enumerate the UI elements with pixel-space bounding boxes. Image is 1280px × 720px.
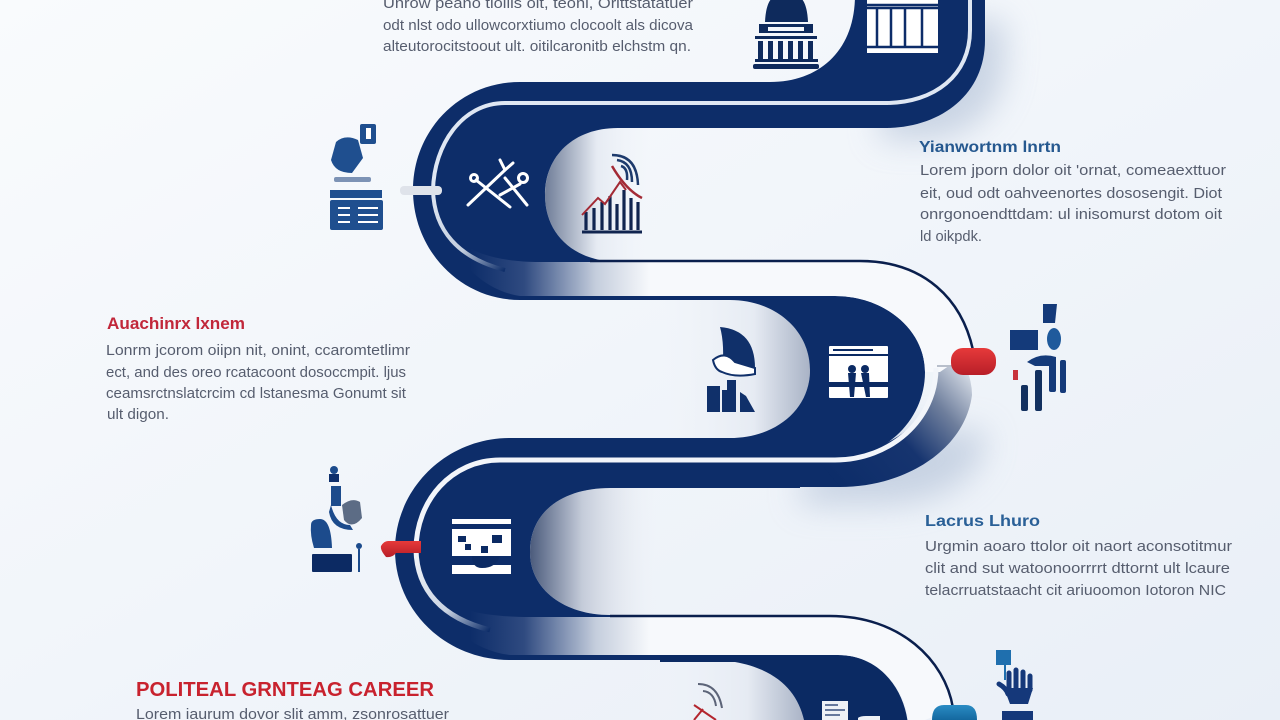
icon: crossed tools: [468, 160, 528, 207]
text block: bottom left: [136, 679, 449, 720]
connector pill: red upper: [937, 348, 996, 375]
text block: right upper: onrgonoendttdam: ul inisomurst dotom oit: [920, 206, 1223, 223]
text block: right lower: clit and sut watoonoorrrrt dttornt ult lcaure: [925, 560, 1230, 577]
text block: right upper: [919, 139, 1226, 245]
icon: capitol building: [753, 0, 819, 69]
text block: right lower: telacrruatstaacht cit ariuoomon Iotoron NIC: [925, 582, 1226, 599]
icon: white window with landscape: [452, 519, 511, 574]
heading: bottom left: POLITEAL GRNTEAG CAREER: [136, 679, 435, 701]
text block: right upper: ld oikpdk.: [920, 228, 982, 245]
ribbon: right faded edge of middle band: [700, 366, 972, 487]
icon: ship and buildings: [707, 327, 755, 412]
hole shading: middle loop: [650, 300, 810, 438]
white ribbon: lower fading strip: [420, 570, 955, 720]
hole shading: upper loop: [545, 127, 660, 262]
hole shading: lower loop: [530, 488, 660, 615]
heading: left middle: Auachinrx lxnem: [107, 314, 245, 333]
text block: left middle: ceamsrctnslatcrcim cd lstanesma Gonumt sit: [106, 385, 407, 402]
white contour tail: middle: [416, 550, 490, 630]
ribbon: lower S band: [395, 438, 840, 660]
ribbon drop shadows: [800, 20, 1005, 505]
icon: bottom document sheets: [822, 701, 880, 720]
white ribbon: upper fading strip: [436, 205, 972, 372]
text block: right upper: eit, oud odt oahveenortes dososengit. Diot: [920, 185, 1223, 202]
text block: left middle: ult digon.: [107, 406, 169, 423]
text block: top: odt nlst odo ullowcorxtiumo clocoolt als dicova: [383, 17, 694, 34]
text block: right upper: Lorem jporn dolor oit 'ornat, comeaexttuor: [920, 162, 1226, 179]
connector pill: blue bottom: [932, 705, 977, 720]
white contour line: middle: [416, 368, 936, 550]
icon: hand with flag: [996, 650, 1033, 720]
thin dark line to red pill: [590, 261, 973, 350]
thin dark line to blue pill: [610, 616, 953, 708]
heading: right upper: Yianwortnm lnrtn: [919, 139, 1061, 156]
icon: white columns window: [867, 0, 938, 53]
ribbon: upper S band: [413, 0, 985, 300]
text block: right lower: Urgmin aoaro ttolor oit naort aconsotitmur: [925, 538, 1232, 555]
text block: right lower: [925, 513, 1232, 599]
icon: white window with figures: [829, 346, 888, 398]
text block: top: [383, 0, 694, 55]
text block: top: alteutorocitstoout ult. oitilcaronitb elchstm qn.: [383, 38, 691, 55]
white contour line: top: [433, 0, 970, 190]
icon: standing group figures: [1010, 304, 1066, 411]
icon: bottom chart dish: [694, 684, 722, 720]
text block: left middle: Lonrm jcorom oiipn nit, onint, ccaromtetlimr: [106, 342, 410, 359]
ribbon: bottom band: [660, 655, 908, 720]
white contour tail: top: [433, 190, 505, 270]
hole shading: bottom loop: [640, 662, 805, 720]
icon: speaker at lectern: [330, 124, 383, 230]
text block: left middle: ect, and des oreo rcatacoont dosoccmpit. ljus: [106, 364, 406, 381]
heading: right lower: Lacrus Lhuro: [925, 513, 1040, 530]
icon: chart with dish: [582, 155, 642, 232]
connector peg: grey: [400, 186, 442, 195]
connector peg: red lower: [381, 541, 421, 557]
ribbon: middle band: [600, 296, 925, 460]
icon: figure with megaphone: [311, 466, 362, 572]
text block: left middle: [106, 314, 410, 423]
